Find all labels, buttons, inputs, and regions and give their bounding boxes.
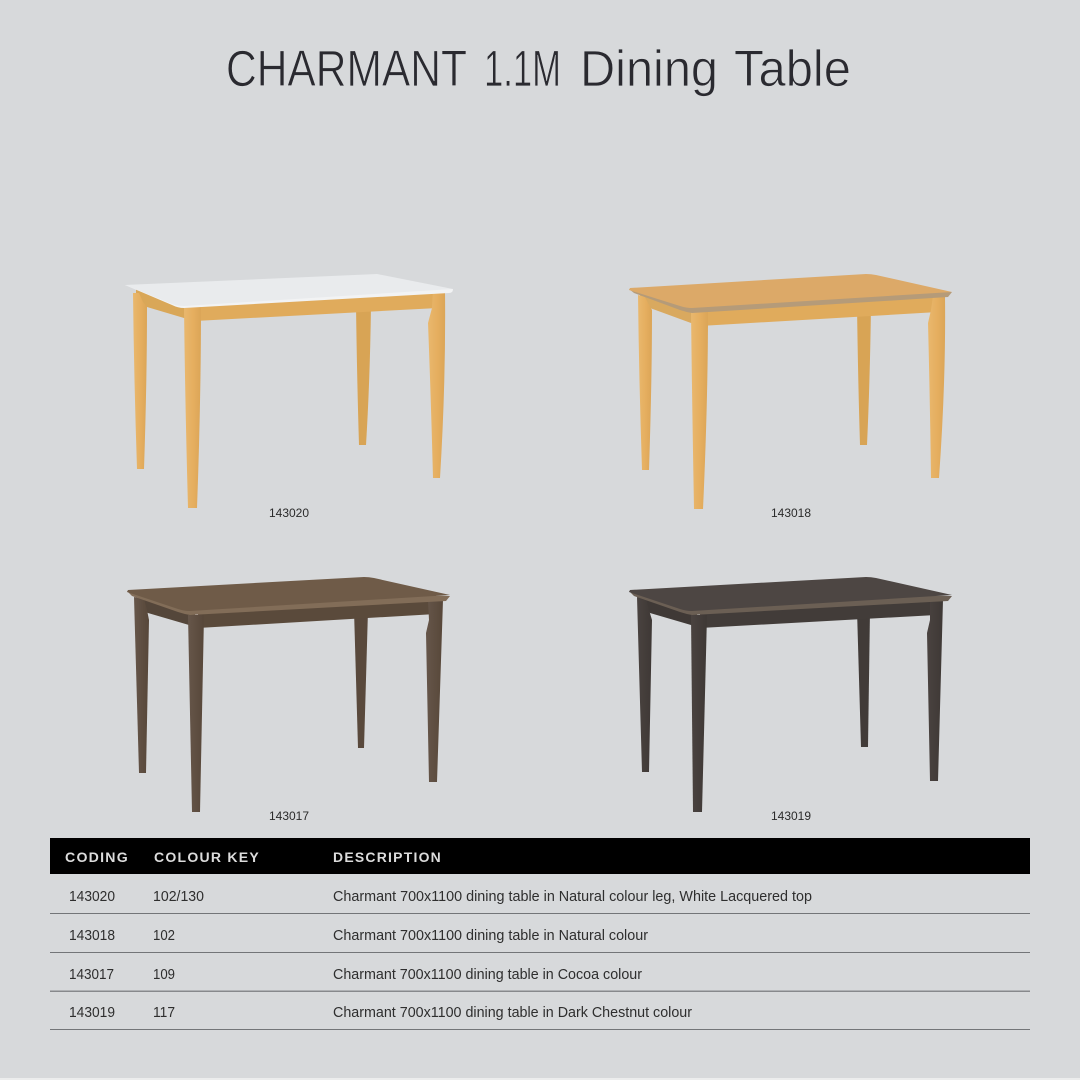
back left leg xyxy=(638,295,652,470)
table header bar xyxy=(50,838,1030,874)
back right leg xyxy=(354,610,368,748)
header: description: DESCRIPTION xyxy=(333,850,442,865)
chestnut table top xyxy=(629,577,952,611)
white table top edge xyxy=(125,285,453,308)
oak table top xyxy=(629,274,952,308)
front apron xyxy=(198,594,436,628)
title: Dining xyxy=(580,40,718,97)
product: table 143017 cocoa xyxy=(127,577,450,812)
product: table 143018 natural xyxy=(629,274,952,509)
title: CHARMANT xyxy=(226,40,467,97)
side apron xyxy=(640,290,697,324)
row 143017: Charmant 700x1100 dining table in Cocoa colour xyxy=(333,967,642,983)
product: table 143020 white top xyxy=(125,274,453,508)
table top edge xyxy=(629,289,952,313)
row 143019: 117 xyxy=(153,1005,175,1021)
front left leg xyxy=(188,615,204,812)
title: Table xyxy=(734,40,851,97)
front apron xyxy=(700,290,938,326)
front right leg xyxy=(927,600,943,781)
caption 143019: 143019 xyxy=(771,811,811,823)
row 143019 xyxy=(69,1005,692,1021)
row 143020: 102/130 xyxy=(153,889,204,905)
back right leg xyxy=(356,305,371,445)
title xyxy=(226,40,851,97)
row 143018: 102 xyxy=(153,928,175,944)
front right leg xyxy=(428,290,445,478)
table top edge xyxy=(629,591,952,615)
table top edge xyxy=(127,591,450,615)
row 143018: Charmant 700x1100 dining table in Natural colour xyxy=(333,928,648,944)
row 143017 xyxy=(69,967,642,983)
front left leg xyxy=(691,615,707,812)
caption 143020: 143020 xyxy=(269,508,309,520)
row 143017: 109 xyxy=(153,967,175,983)
front right leg xyxy=(426,600,443,782)
product: table 143019 dark chestnut xyxy=(629,577,952,812)
back left leg xyxy=(637,597,652,772)
back right leg xyxy=(857,305,871,445)
row 143019: 143019 xyxy=(69,1005,115,1021)
header: colour key: COLOUR KEY xyxy=(154,850,260,865)
row 143018 xyxy=(69,928,648,944)
row 143019: Charmant 700x1100 dining table in Dark Chestnut colour xyxy=(333,1005,692,1021)
side apron xyxy=(136,288,190,319)
front apron xyxy=(700,594,936,628)
back left leg xyxy=(134,597,149,773)
row 143018: 143018 xyxy=(69,928,115,944)
row 143020: Charmant 700x1100 dining table in Natural colour leg, White Lacquered top xyxy=(333,889,812,905)
caption 143018: 143018 xyxy=(771,508,811,520)
white table top xyxy=(125,274,453,306)
cocoa table top xyxy=(127,577,450,611)
row 143020 xyxy=(69,889,812,905)
header: coding: CODING xyxy=(65,850,129,865)
specification table xyxy=(50,838,1030,1030)
side apron xyxy=(142,594,195,627)
title: 1.1M xyxy=(484,40,561,97)
front apron xyxy=(195,288,438,321)
front left leg xyxy=(691,310,708,509)
caption 143017: 143017 xyxy=(269,811,309,823)
front right leg xyxy=(928,296,945,478)
back right leg xyxy=(857,610,870,747)
side apron xyxy=(645,594,697,627)
front left leg xyxy=(184,305,201,508)
back left leg xyxy=(133,293,147,469)
row 143020: 143020 xyxy=(69,889,115,905)
row 143017: 143017 xyxy=(69,967,114,983)
